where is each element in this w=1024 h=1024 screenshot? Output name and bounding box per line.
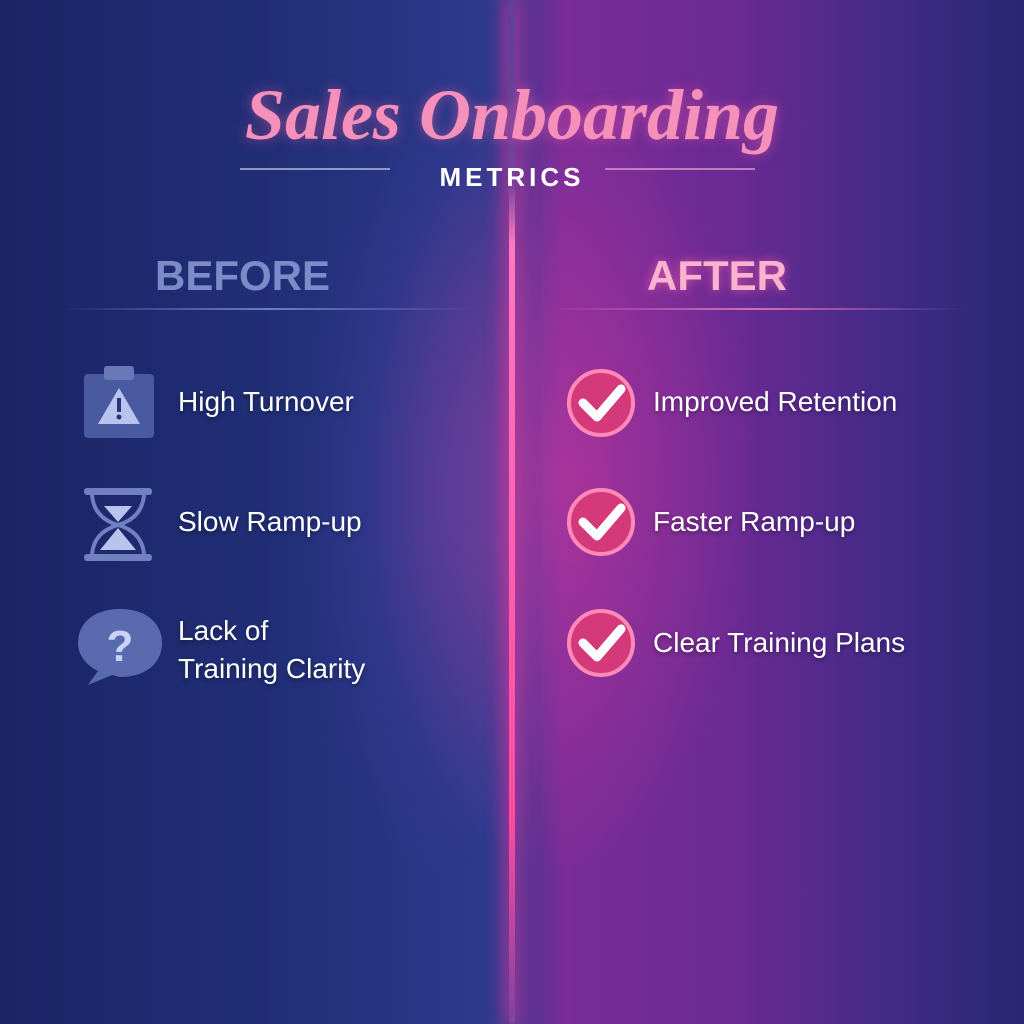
- text: lack of training clarity: [178, 615, 366, 688]
- text: lack of training clarity: Training Clarity: [178, 653, 365, 684]
- text: lack of training clarity: Lack of: [178, 615, 268, 646]
- icon: question bubble: ?: [107, 622, 133, 671]
- heading: before: BEFORE: [155, 252, 330, 299]
- title: [240, 75, 782, 192]
- icon: question bubble: [78, 609, 162, 685]
- icon: hourglass: [84, 488, 152, 561]
- text: clear training plans: Clear Training Plans: [653, 627, 905, 658]
- icon: check 1: [567, 369, 635, 437]
- heading: after: AFTER: [647, 252, 787, 299]
- text: slow ramp-up: Slow Ramp-up: [178, 506, 362, 537]
- icon: check 3: [567, 609, 635, 677]
- text: improved retention: Improved Retention: [653, 386, 897, 417]
- title: METRICS: [440, 162, 584, 192]
- icon: clipboard warning: [84, 366, 154, 438]
- text: high turnover: High Turnover: [178, 386, 354, 417]
- center glowing line: [509, 0, 515, 1024]
- icon: check 2: [567, 488, 635, 556]
- title: Sales Onboarding: [245, 75, 779, 155]
- text: faster ramp-up: Faster Ramp-up: [653, 506, 855, 537]
